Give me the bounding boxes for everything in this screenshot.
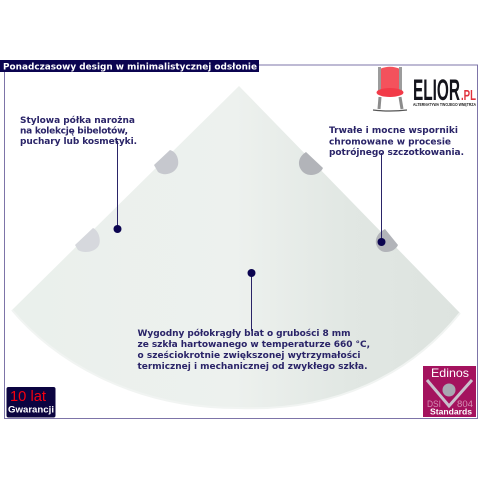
text: o sześciokrotnie zwiększonej wytrzymałości <box>138 350 360 361</box>
badge: 10 lat warranty: 10 lat <box>10 388 47 405</box>
callout: chrome brackets <box>329 126 464 246</box>
leader line <box>380 153 382 242</box>
leader line <box>116 141 118 229</box>
leader line <box>250 273 252 331</box>
text: Stylowa półka narożna <box>20 115 135 126</box>
bracket: lower right <box>376 229 398 252</box>
badge: Edinos DSI 804 Standards: Edinos <box>431 366 469 380</box>
icon: red chair <box>373 67 407 111</box>
text: puchary lub kosmetyki. <box>20 137 137 147</box>
text: ze szkła hartowanego w temperaturze 660 °C, <box>138 340 370 350</box>
callout: tabletop <box>138 269 370 372</box>
bracket: lower left <box>75 228 100 252</box>
badge: 10 lat warranty: Gwarancji <box>8 404 54 414</box>
callout: shelf style <box>20 115 137 233</box>
text: na kolekcję bibelotów, <box>20 126 128 136</box>
logo suffix: .PL <box>461 87 476 104</box>
text: Wygodny półokrągły blat o grubości 8 mm <box>138 328 350 339</box>
badge: Edinos DSI 804 Standards <box>423 366 476 417</box>
badge: Edinos DSI 804 Standards: 804 <box>457 399 473 409</box>
bracket: upper left <box>154 150 178 174</box>
title bar: Ponadczasowy design w minimalistycznej odsłonie <box>3 62 257 72</box>
badge: Edinos DSI 804 Standards: Standards <box>430 408 473 416</box>
badge: 10 lat warranty <box>6 387 56 418</box>
glass corner shelf <box>12 86 460 408</box>
bracket: upper right <box>299 152 323 175</box>
logo: ELIOR.pl <box>373 67 477 111</box>
dot <box>248 269 256 277</box>
frame <box>4 65 478 418</box>
text: termicznej i mechanicznej od zwykłego szkła. <box>138 362 368 372</box>
text: potrójnego szczotkowania. <box>329 147 464 158</box>
badge: Edinos DSI 804 Standards: DSI <box>427 399 441 409</box>
text: Trwałe i mocne wsporniki <box>329 126 458 136</box>
dot <box>114 225 122 233</box>
dot <box>378 238 386 246</box>
text: chromowane w procesie <box>329 138 451 148</box>
